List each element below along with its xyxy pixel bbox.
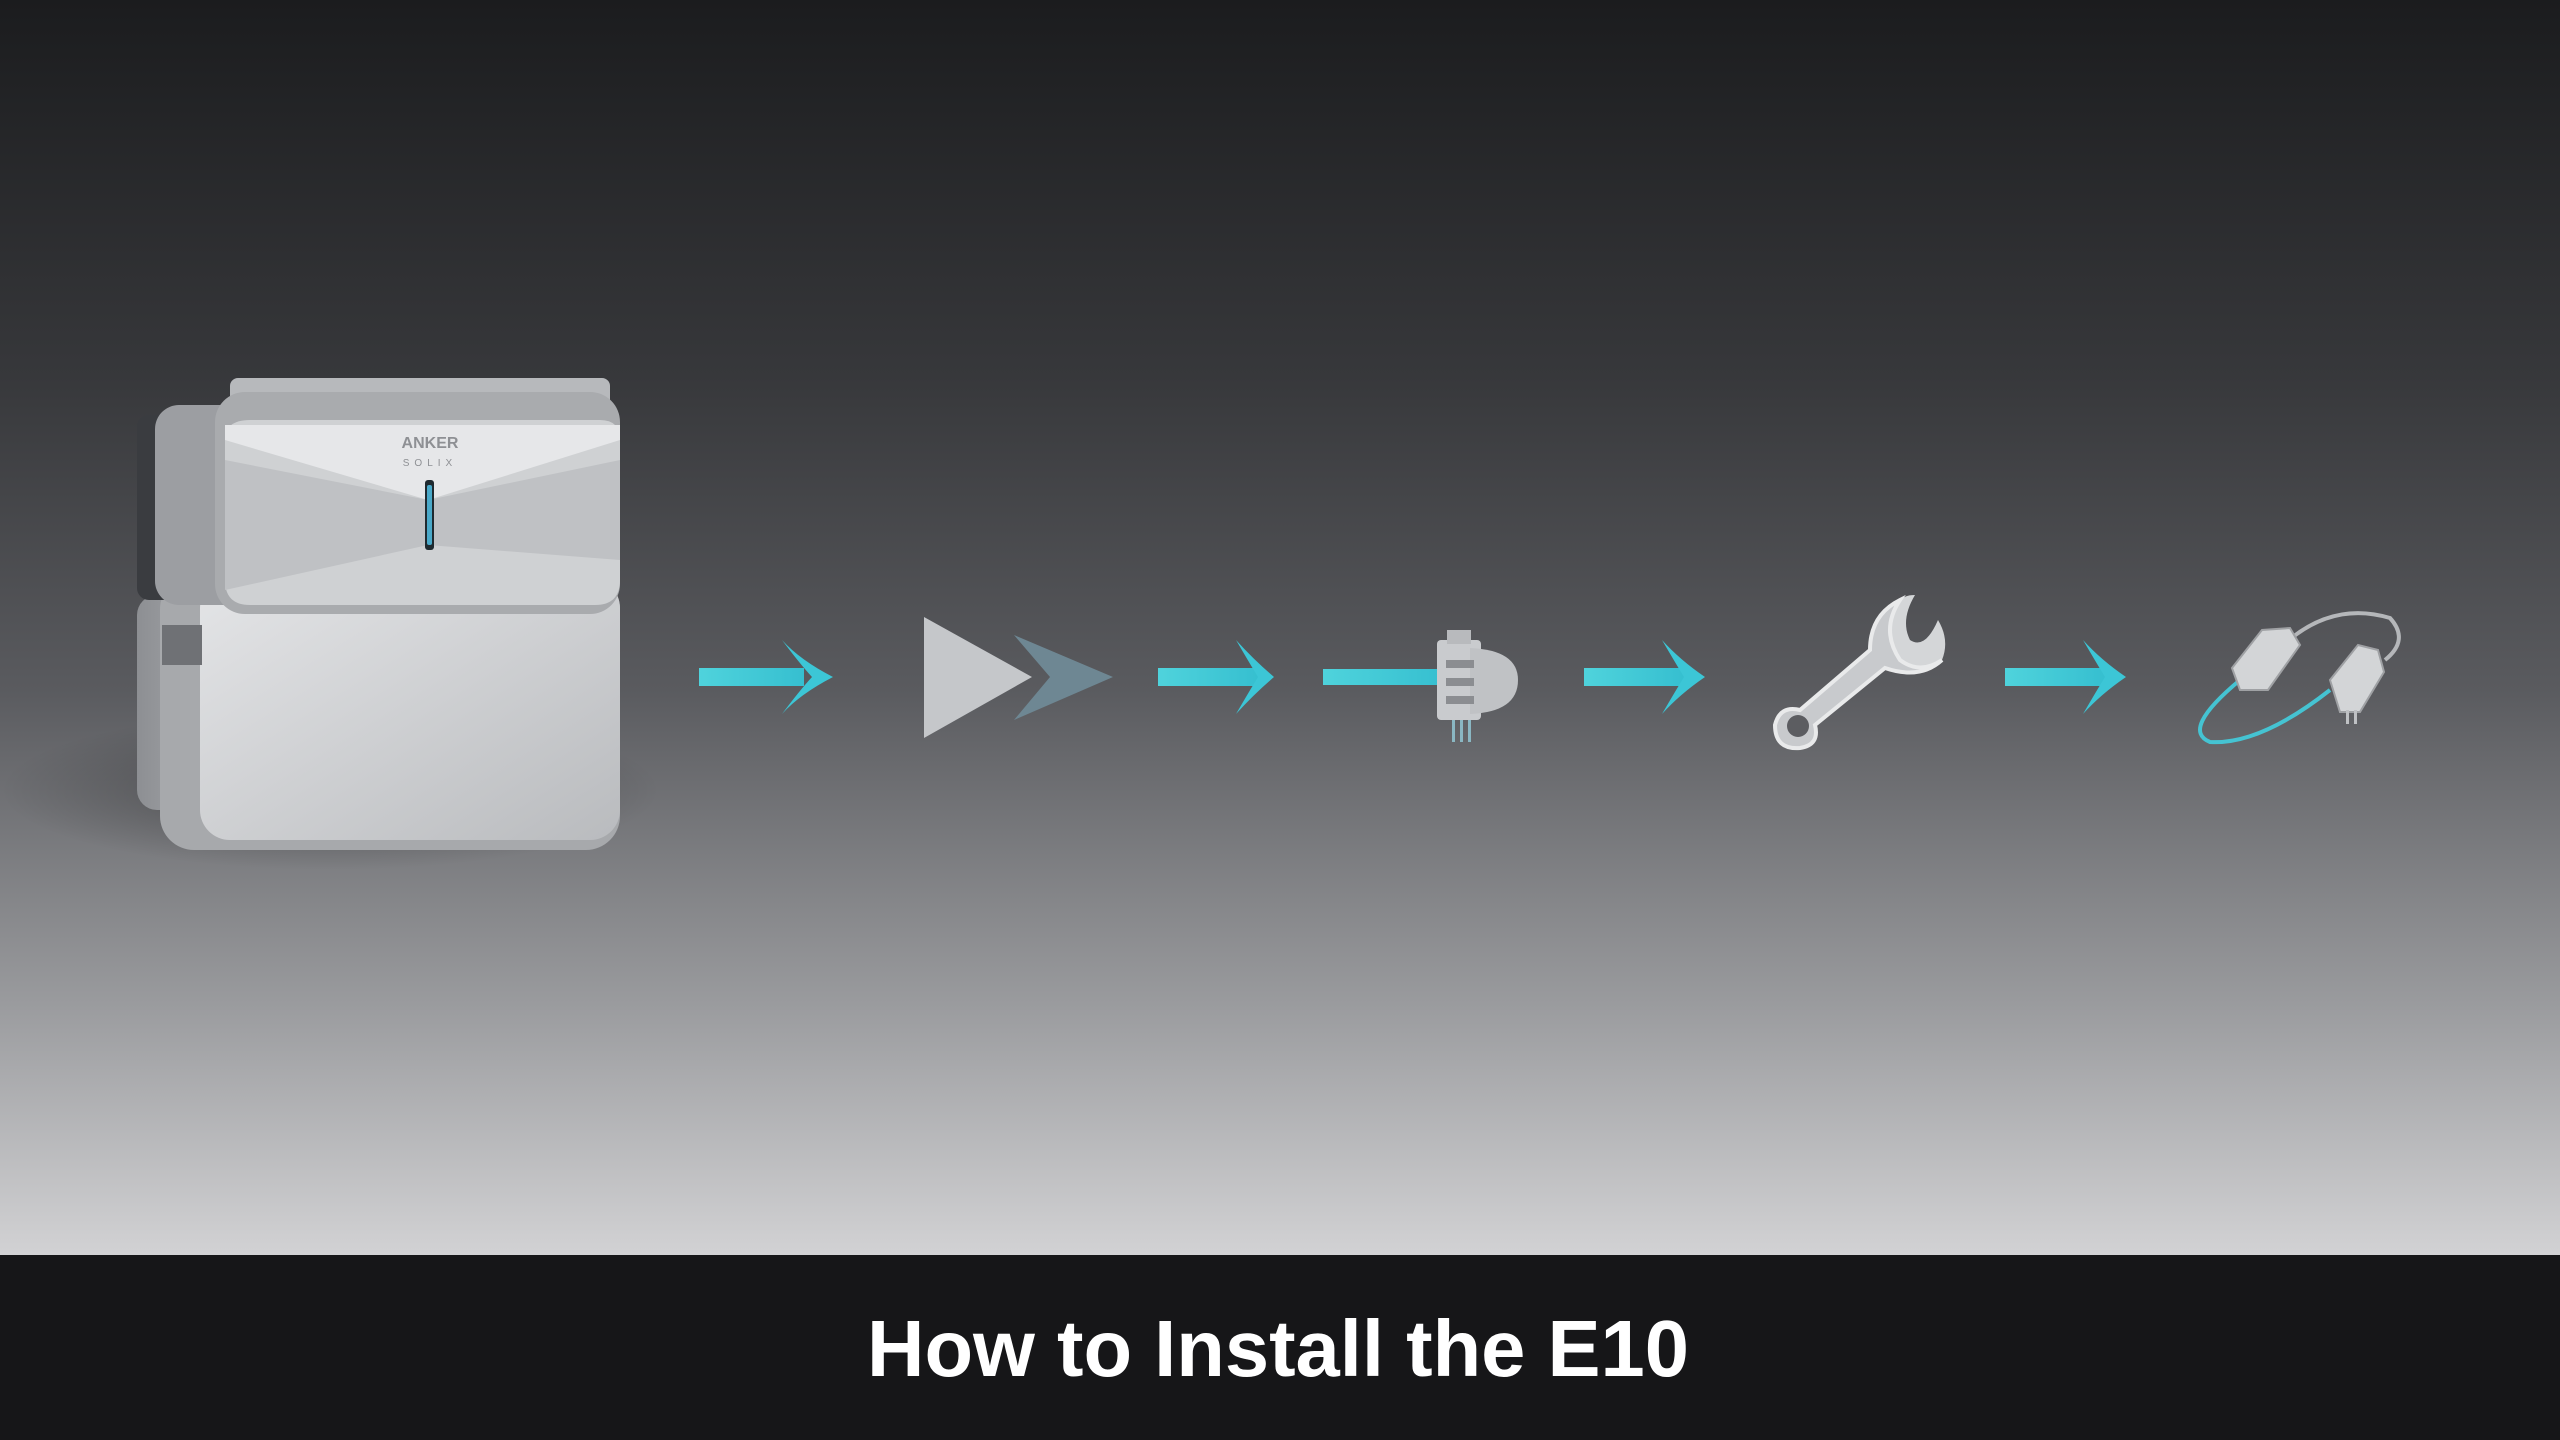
title bar	[0, 1255, 2560, 1440]
battery: top unit: ANKER	[402, 435, 459, 452]
icon: play chevrons	[924, 617, 1113, 738]
battery: top unit: SOLIX	[403, 458, 457, 469]
icon: cables/adapters	[2200, 613, 2399, 742]
icon: wrench	[1775, 595, 1945, 748]
arrow 1	[699, 640, 833, 714]
arrow 4	[2005, 640, 2126, 714]
title: How to Install the E10	[867, 1304, 1689, 1393]
arrow 3	[1584, 640, 1705, 714]
icon: plug connector	[1323, 630, 1518, 742]
battery: bottom unit	[137, 575, 620, 850]
battery product	[0, 378, 660, 870]
arrow 2	[1158, 640, 1274, 714]
battery: top unit	[137, 378, 620, 614]
